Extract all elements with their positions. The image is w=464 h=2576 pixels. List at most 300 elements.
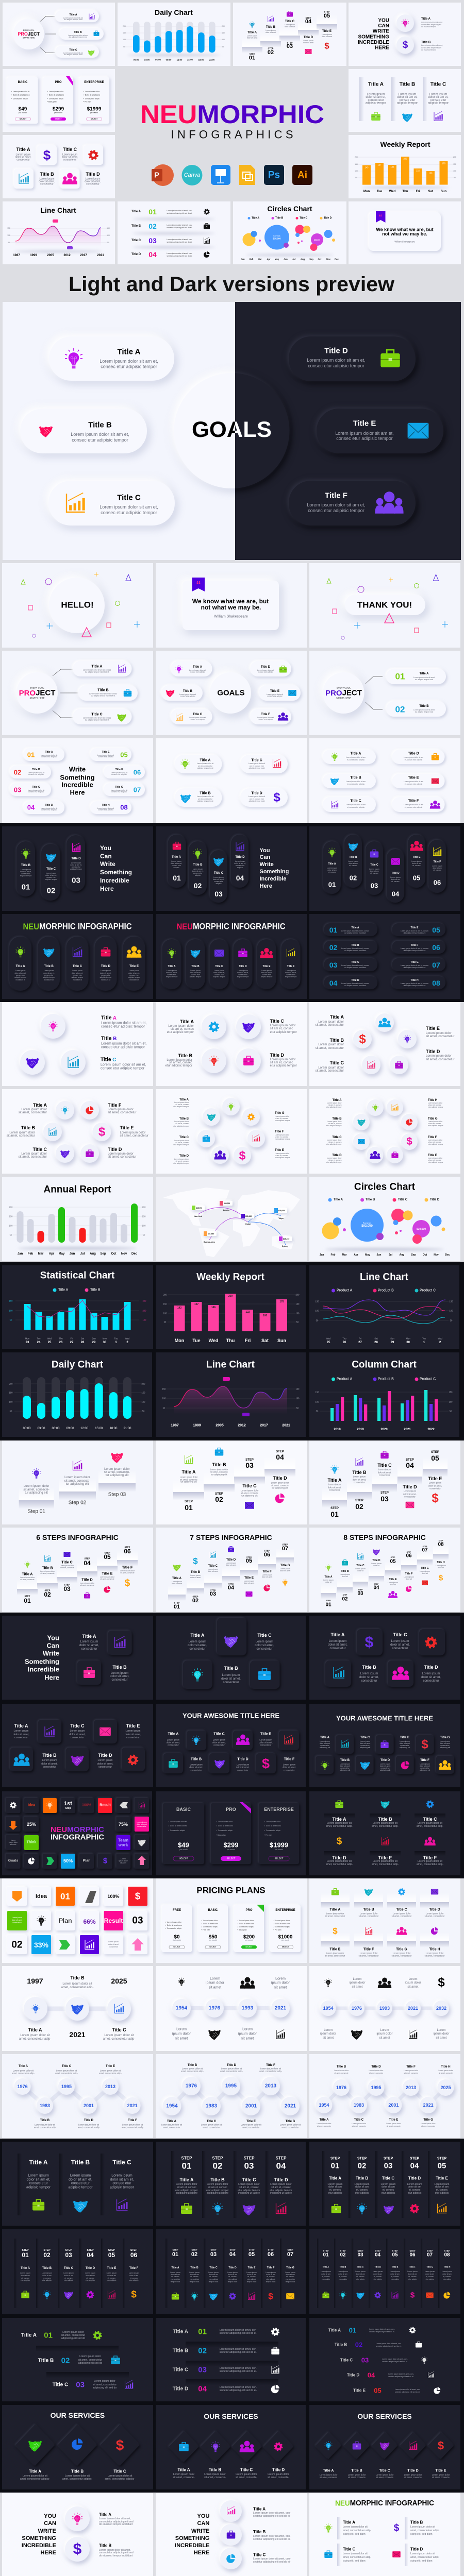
panel: dark four vertical pills: consec etur <box>214 880 224 883</box>
panel: dark five steps columns: etur adipisic <box>382 2192 395 2195</box>
panel: dark column chart <box>309 1352 459 1437</box>
panel: seven circles: sit am et, consec <box>176 1160 189 1162</box>
panel: six circles: Lorem ipsum dolor <box>21 1108 47 1111</box>
panel: five steps: consectetur <box>379 1473 390 1477</box>
panel: four tiles: consectetur <box>63 159 77 162</box>
panel: five steps: Lorem ipsum <box>328 1483 341 1486</box>
panel: dark six steps columns: dolor sit am <box>21 2275 30 2277</box>
panel: five steps: 04 <box>406 1461 414 1469</box>
panel: seven circles: Lorem ipsum dolor <box>174 1101 189 1104</box>
panel: four steps: Title A <box>181 1469 196 1475</box>
panel: dark five steps columns: STEP <box>330 2157 340 2161</box>
panel: dark list five: Title E <box>353 2388 366 2393</box>
panel: eight steps: STEP <box>358 1589 363 1591</box>
panel: dark neumorphic five pills: adipisic tempor <box>43 976 55 978</box>
panel: you can write, three circles: HERE <box>194 2550 209 2556</box>
panel: dark feature tile grid: ipsum dolor <box>9 1841 18 1843</box>
panel: dark eight numbered pills <box>309 914 460 999</box>
panel: dark eight numbered pills: Title D <box>351 979 359 982</box>
panel: dark list five: sectetur adipiscing elit sed do ei- <box>369 2331 395 2333</box>
panel: dark neumorphic five pills: Lorem ipsum <box>101 970 111 972</box>
panel: pricing plans: ✓ Consectetur adipis <box>237 1926 254 1928</box>
panel: dark list five <box>309 2318 460 2401</box>
panel: world map: $35,219 <box>283 1238 289 1240</box>
panel: dark list three <box>2 2318 153 2401</box>
panel: three vertical columns: Lorem ipsum <box>367 93 385 96</box>
panel: seven steps: 07 <box>282 1546 288 1552</box>
panel: five steps: dolor sit amet, <box>378 1471 391 1473</box>
panel: zigzag timeline eight: 1976 <box>336 2085 346 2090</box>
panel: pricing cards: ✓ Dolor sit amet cons <box>47 94 64 96</box>
panel: dark list five: sectetur adipiscing elit sed do ei- <box>388 2376 414 2378</box>
panel: eight numbered pills: 06 <box>134 769 141 776</box>
panel: dark four tiles <box>309 1616 460 1700</box>
panel: light eight columns with shelf: Lorem ipsum dolor <box>393 1952 411 1955</box>
panel: dark eight steps columns: Title D <box>374 2266 381 2268</box>
panel: dark five steps columns: STEP <box>437 2157 446 2161</box>
panel: eight steps: dolor sit <box>342 1575 348 1578</box>
panel: dark seven tiles: consectetur <box>360 1744 370 1747</box>
panel: dark weekly report: 146 <box>211 1306 216 1309</box>
panel: dark list three: Title A <box>21 2333 37 2338</box>
panel: dark eight steps columns: et, consec <box>443 2276 451 2278</box>
panel: dark six steps columns: Lorem ipsum <box>63 2272 74 2274</box>
panel: pricing plans: PRICING PLANS <box>196 1886 266 1895</box>
panel: dark seven steps columns: dolor sit am <box>247 2274 256 2276</box>
panel: dark seven steps columns: 05 <box>248 2251 255 2258</box>
panel: goals six pills: Title B <box>183 690 193 693</box>
panel: dark column chart: 150 <box>449 1391 453 1393</box>
panel: dark statistical chart: 200 <box>142 1310 146 1312</box>
panel: dark six steps columns: et, consec <box>43 2277 51 2279</box>
panel: dark daily chart: 00:00 <box>23 1427 31 1430</box>
panel: eight circles: Lorem ipsum dolor <box>428 1121 443 1123</box>
panel: seven circles: Title B <box>179 1117 189 1121</box>
panel: eight steps: Title B <box>341 1570 349 1573</box>
panel: three steps <box>2 1440 153 1524</box>
panel: circles chart: Apr <box>267 258 271 261</box>
panel: six circles: Title D <box>108 1147 122 1152</box>
panel: seven steps: dolor sit amet <box>244 1582 254 1584</box>
panel: dark three tiles: Lorem ipsum <box>222 1674 240 1677</box>
panel: timeline three: amet, consectetur adip- <box>103 2038 135 2041</box>
panel: six circles: sit amet, consectetur <box>120 1134 148 1138</box>
panel: six circles: Lorem ipsum dolor <box>108 1108 134 1111</box>
panel: dark pricing: ✓ Dolor sit amet consec <box>168 1825 187 1827</box>
panel: six icon pills: et, consec etur adipisic <box>405 759 423 761</box>
panel: five step staircase: STEP <box>268 47 274 49</box>
panel: dark pricing: ✓ Consectetur adipis <box>216 1829 233 1832</box>
panel: dark line chart: Mon <box>406 1337 410 1340</box>
panel: light feature tile grid: 66% <box>83 1918 96 1925</box>
panel: eight numbered pills: Write <box>69 766 86 773</box>
panel: eight steps: 08 <box>438 1541 444 1548</box>
panel: six icon pills: Title D <box>408 752 419 755</box>
panel: dark six tiles: Lorem ipsum <box>167 1738 180 1741</box>
panel: light and dark preview: Title E <box>353 419 376 428</box>
panel: dark four vertical pills: adipisic <box>237 867 243 869</box>
panel: dark neumorphic five pills: Lorem ipsum <box>129 970 139 972</box>
panel: dark four tiles: dolor sit amet, <box>359 1676 379 1679</box>
panel: dark eight steps columns: dolor sit am <box>321 2273 330 2275</box>
panel: our services four diamonds: sit amet, consecte- <box>204 2476 226 2479</box>
panel: dark weekly report: Tue <box>192 1338 201 1343</box>
panel: dark six steps columns: et, consec <box>108 2277 115 2279</box>
panel: dark seven steps columns: etur adipisic <box>209 2278 218 2280</box>
panel: three vertical columns: adipisic tempor <box>366 102 386 105</box>
panel: quote card <box>349 201 461 264</box>
panel: dark four vertical pills: 03 <box>214 890 223 898</box>
panel: dark seven tiles: dolor sit amet <box>320 1742 330 1744</box>
panel: six steps: 02 <box>44 1591 51 1598</box>
panel: neumorphic four items: Title B <box>410 2520 423 2524</box>
panel: dark weekly report: Thu <box>226 1338 235 1343</box>
panel: annual report: 150 <box>142 1215 146 1218</box>
panel: six steps: STEP <box>64 1584 70 1586</box>
panel: you can write two circles: Lorem ipsum dolor sit amet, <box>421 22 443 24</box>
panel: seven steps: Lorem ipsum <box>244 1580 254 1582</box>
panel: dark five tiles: Lorem ipsum <box>126 1730 140 1733</box>
panel: circles chart large: Earnings <box>363 1222 371 1224</box>
panel: six steps: 03 <box>63 1585 71 1592</box>
panel: dark feature tile grid: ipsum dolor <box>119 1860 128 1862</box>
panel: eight circles: etur adipisic tempor <box>326 1161 342 1163</box>
panel: seven circles: etur adipisic tempor <box>173 1106 189 1108</box>
panel: zigzag timeline seven: amet, consectetur <box>203 2126 220 2129</box>
panel: dark neumorphic five pills: adipisic tempor <box>14 976 27 978</box>
panel: eight circles: Title H <box>428 1099 437 1102</box>
panel: line chart: 150 <box>7 227 10 229</box>
panel: six icon pills: Title B <box>350 776 361 780</box>
panel: eight circles: Title A <box>333 1099 342 1102</box>
panel: dark six vertical pills <box>309 826 460 911</box>
panel: light eight columns with shelf: sit amet, consectetur <box>392 1914 412 1918</box>
panel: dark five steps columns: etur adipisic <box>328 2192 342 2195</box>
panel: eight steps: dolor sit <box>325 1581 332 1583</box>
panel: dark three tiles: consectetur <box>256 1648 273 1651</box>
panel: circles chart: Earnings <box>273 235 280 237</box>
panel: eight steps: Lorem ipsum <box>323 1579 334 1581</box>
panel: weekly report: 50 <box>454 177 456 179</box>
panel: light eight columns with shelf: sit amet, consectetur <box>425 1914 445 1918</box>
panel: light feature tile grid: Lorem ipsum <box>12 1917 22 1919</box>
panel: dark seven steps columns: 02 <box>191 2251 197 2258</box>
panel: timeline five: sit amet <box>407 1986 419 1989</box>
panel: dark pricing: $49 <box>178 1841 189 1849</box>
panel: dark neumorphic six pills: Title A <box>168 965 176 968</box>
panel: zigzag timeline eight: sit amet, consecte <box>369 2072 383 2074</box>
panel: dark seven steps columns: Title B <box>190 2266 198 2269</box>
panel: seven steps: STEP <box>264 1550 270 1552</box>
panel: pricing cards: ✓ Consectetur adipis <box>83 98 100 100</box>
panel: project three pills: Title A <box>91 665 103 669</box>
panel: dark three vertical pills: adipisic tempor <box>20 875 32 877</box>
panel: our services five diamonds <box>309 2405 460 2489</box>
panel: timeline five: Lorem <box>380 2029 389 2032</box>
panel: dark seven tiles: consectetur <box>400 1744 410 1747</box>
panel: four tiles: Lorem ipsum <box>62 154 77 157</box>
panel: dark six columns with shelf: Lorem ipsum dolor sit <box>418 1860 443 1863</box>
panel: dark statistical chart: 150 <box>9 1299 13 1302</box>
panel: dark three columns: Lorem ipsum <box>28 2174 49 2177</box>
panel: dark four vertical pills: You <box>260 848 270 854</box>
panel: you can write two circles: HERE <box>375 45 389 50</box>
panel: dark pricing: $299 <box>224 1841 238 1849</box>
panel: dark six vertical pills: dolor sit am <box>370 870 379 872</box>
panel: four icon pills: Title C <box>251 758 262 762</box>
panel: dark six vertical pills: 05 <box>413 874 420 882</box>
panel: dark six steps columns: etur adipisic <box>42 2279 52 2281</box>
panel: eight steps: 04 <box>373 1585 379 1591</box>
panel: six icon pills: Title A <box>350 752 361 755</box>
panel: timeline five: 2021 <box>408 2006 418 2011</box>
panel: daily chart: 100 <box>123 39 126 41</box>
panel: pricing plans: SELECT <box>245 1946 253 1948</box>
panel: dark feature tile grid: dolor sit amet <box>137 1823 147 1825</box>
panel: eight circles: etur adipisic tempor <box>326 1106 342 1108</box>
panel: seven steps: Lorem ipsum <box>208 1568 218 1570</box>
panel: dark three vertical pills: consec etur <box>72 866 81 868</box>
panel: dark daily chart: 100 <box>9 1400 13 1403</box>
panel: weekly report: 146 <box>391 166 394 168</box>
panel: dark four steps columns: etur adipisic tempor <box>270 2189 292 2192</box>
panel: project two pills: Title B <box>419 705 429 708</box>
panel: our services five diamonds: $ <box>438 2439 444 2452</box>
panel: dark six steps columns: etur adipisic <box>129 2279 139 2281</box>
panel: seven circles: sit am et, consec <box>176 1142 189 1144</box>
panel: eight numbered pills: Title H <box>102 804 110 807</box>
panel: eight numbered pills: Title B <box>32 768 40 771</box>
panel: dark eight numbered pills: dui adipisc tempor incididunt <box>344 950 366 952</box>
panel: world map <box>156 1177 307 1261</box>
panel: dark seven steps columns: et, consec <box>267 2276 275 2278</box>
panel: eight circles: etur adipisic tempor <box>428 1143 443 1145</box>
panel: dark six columns with shelf: $ <box>337 1836 342 1846</box>
panel: circles chart large: $93,000 <box>361 1225 373 1228</box>
panel: dark two tiles: consectetur <box>81 1648 97 1651</box>
panel: dark neumorphic six pills: adipisic tempor <box>237 976 249 978</box>
panel: dark neumorphic five pills: NEUMORPHIC INFOGRAPHIC <box>23 921 132 931</box>
panel: dark six steps columns: $ <box>131 2290 137 2300</box>
panel: dark neumorphic six pills: Title F <box>287 965 294 968</box>
panel: dark two tiles: Lorem ipsum <box>80 1640 98 1643</box>
panel: zigzag timeline seven: 1954 <box>166 2103 178 2109</box>
panel: dark list five: Lorem ipsum dolor sit amet, con- <box>376 2343 402 2345</box>
panel: dark seven steps columns: STEP <box>230 2248 236 2251</box>
panel: three vertical columns: dolor sit am et, <box>428 96 449 99</box>
panel: pricing cards: + Basic plan <box>47 101 57 103</box>
hero title <box>140 100 324 141</box>
panel: dark eight steps columns: Lorem ipsum <box>321 2270 331 2273</box>
panel: dark column chart: 2021 <box>404 1428 411 1431</box>
panel: dark six columns with shelf <box>309 1791 460 1875</box>
panel: dark six tiles: dolor sit amet, <box>189 1766 203 1768</box>
panel: circles chart: Jan <box>241 258 245 261</box>
panel: dark six steps columns: 05 <box>108 2251 115 2259</box>
panel: dark neumorphic six pills <box>156 914 307 999</box>
panel: seven circles <box>156 1089 307 1174</box>
panel: dark three tiles: Lorem ipsum <box>256 1640 273 1643</box>
panel: dark seven steps columns: et, consec <box>286 2276 294 2278</box>
panel: light and dark preview: Lorem ipsum dolor sit am et, <box>307 502 366 507</box>
panel: seven circles: sit am et, consec <box>275 1155 288 1157</box>
panel: dark six vertical pills: Lorem ipsum <box>369 868 379 870</box>
panel: eight numbered pills: Lorem ipsum dolor sit <box>28 789 44 791</box>
panel: four circles: sit am et, consec <box>270 1061 293 1064</box>
panel: line chart: 2005 <box>47 254 54 257</box>
panel: circles chart large: $30,000 <box>417 1228 426 1231</box>
panel: numbered list: Title A <box>131 210 141 213</box>
panel: dark five tiles: dolor sit amet, <box>97 1762 113 1766</box>
panel: seven circles: sit am et, consec <box>176 1104 189 1106</box>
panel: dark neumorphic six pills: consec etur <box>167 974 177 976</box>
panel: dark five tiles: consectetur <box>14 1736 28 1739</box>
panel: light feature tile grid: Plan <box>58 1917 72 1925</box>
panel: dark neumorphic five pills: Lorem ipsum <box>72 970 82 972</box>
panel: six icon pills: et, consec etur adipisic <box>347 783 365 785</box>
panel: neumorphic four items <box>309 2493 460 2576</box>
panel: dark three vertical pills: You <box>100 844 111 852</box>
panel: zigzag timeline seven: amet, consectetur <box>242 2126 260 2129</box>
panel: seven circles: Title D <box>179 1155 189 1158</box>
panel: six circles: Title B <box>21 1125 35 1130</box>
panel: dark three vertical pills: Something <box>100 869 132 876</box>
panel: quote slide: We know what we are, but <box>192 598 269 605</box>
panel: dark line chart: Line Chart <box>360 1272 409 1283</box>
panel: dark eight steps columns: dolor sit am <box>390 2273 400 2275</box>
panel: dark eight steps columns: et, consec <box>374 2276 382 2278</box>
panel: dark neumorphic five pills: consec etur <box>73 974 82 976</box>
panel: four steps: sit amet, consecte <box>210 1470 228 1473</box>
panel: seven steps: dolor sit amet <box>172 1583 182 1585</box>
panel: dark daily chart: 12:00 <box>80 1427 89 1430</box>
panel: dark seven steps columns: tempor incid <box>190 2281 199 2283</box>
panel: five circles: Lorem ipsum dolor <box>426 1032 452 1035</box>
panel: seven steps: Lorem ipsum <box>190 1574 201 1577</box>
panel: dark six tiles: $ <box>262 1756 270 1771</box>
panel: dark four tiles: Title B <box>362 1665 376 1670</box>
panel: dark six steps columns: Title D <box>86 2267 95 2270</box>
panel: dark two tiles: Title A <box>82 1634 96 1639</box>
panel: three circles: Title A <box>101 1015 117 1021</box>
panel: zigzag timeline eight: sit amet, consecte <box>352 2125 366 2127</box>
panel: zigzag timeline seven <box>156 2054 307 2138</box>
panel: zigzag timeline eight: Title B <box>337 2065 346 2069</box>
panel: dark line chart: Product B <box>378 1289 394 1292</box>
panel: dark feature tile grid: sit amet <box>120 1862 126 1864</box>
panel: dark seven steps columns: et, consec <box>228 2276 237 2278</box>
panel: seven circles: sit am et, consec <box>275 1117 288 1120</box>
panel: weekly report: 100 <box>453 170 456 172</box>
panel: you can write two circles: do eiusmod tempor <box>421 26 437 28</box>
panel: timeline three: Lorem ipsum dolor sit <box>62 1982 92 1986</box>
panel: you can write, two circles: do eiusmod tempor incididunt <box>99 2523 133 2526</box>
panel: dark six tiles: Title C <box>213 1732 225 1736</box>
panel: light feature tile grid: 100% <box>107 1894 120 1899</box>
panel: dark four steps columns: incididunt ut labore <box>176 2192 197 2195</box>
panel: project three pills <box>2 651 153 735</box>
panel: dark eight steps columns: $ <box>410 2291 415 2300</box>
panel: our services four diamonds: Title C <box>240 2468 253 2472</box>
panel: five steps: dolor sit amet, <box>353 1479 366 1481</box>
panel: you can write two circles: INCREDIBLE <box>358 40 389 45</box>
panel: dark neumorphic five pills: Title D <box>101 965 111 968</box>
panel: dark neumorphic six pills: dolor sit am et, <box>213 972 225 974</box>
panel: seven circles: Lorem ipsum dolor <box>275 1153 290 1155</box>
panel: you can write two circles: SOMETHING <box>358 34 389 40</box>
panel: annual report: Apr <box>49 1252 55 1256</box>
panel: five steps: Title B <box>352 1470 367 1475</box>
panel: pricing plans: per month <box>245 1939 253 1941</box>
panel: thank you <box>309 563 460 648</box>
panel: line chart: 50 <box>8 242 10 244</box>
panel: weekly report: Weekly Report <box>380 140 430 148</box>
panel: our services five diamonds: sit amet, consecte <box>376 2476 394 2479</box>
panel: three vertical columns: Lorem ipsum <box>429 93 447 96</box>
panel: dark seven steps columns: Lorem ipsum <box>189 2272 200 2274</box>
panel: pricing plans: first month <box>173 1939 181 1941</box>
panel: eight circles: Title G <box>428 1117 438 1121</box>
panel: dark four vertical pills: dolor sit am et, <box>171 862 182 865</box>
panel: dark five steps columns: etur adipisic <box>435 2192 449 2195</box>
panel: neumorphic four items: Title A <box>343 2520 355 2524</box>
panel: daily chart: 50 <box>123 46 125 48</box>
panel: dark four vertical pills: Here <box>260 883 272 889</box>
panel: five steps: Lorem ipsum <box>429 1482 442 1484</box>
panel: four steps: Title C <box>242 1483 257 1488</box>
panel: dark six steps columns: 03 <box>65 2251 72 2259</box>
panel: daily chart: 12:00 <box>177 59 183 61</box>
panel: dark eight steps columns: etur adipis <box>322 2278 330 2280</box>
panel: four steps: Title D <box>273 1476 287 1481</box>
panel: neumorphic four items: amet, consectetuer adipi- <box>410 2529 439 2532</box>
panel: five step staircase: Title D <box>304 36 313 39</box>
panel: dark four tiles: Title D <box>424 1665 438 1670</box>
panel: dark five steps columns: Lorem ipsum <box>355 2183 369 2186</box>
panel: dark three tiles: dolor sit amet, <box>188 1644 207 1647</box>
panel: five steps: $ <box>432 1491 439 1505</box>
panel: pricing cards: per month <box>19 111 27 113</box>
panel: dark four vertical pills: Can <box>260 854 271 860</box>
panel: dark four steps columns: etur adipisic tempor <box>238 2189 260 2192</box>
panel: seven steps: STEP <box>246 1556 252 1559</box>
panel: dark six steps columns: 02 <box>43 2251 51 2259</box>
panel: you can write two circles: Title B <box>421 41 431 44</box>
panel: five circles: Lorem ipsum dolor <box>318 1021 344 1024</box>
panel: zigzag timeline six: amet, consectetur adip- <box>12 2072 35 2074</box>
panel: dark feature tile grid: Result <box>100 1803 111 1807</box>
panel: five steps: 02 <box>355 1502 363 1511</box>
panel: dark list five: Lorem ipsum dolor sit amet, con- <box>382 2358 408 2360</box>
panel: dark seven steps columns: tempor incid <box>209 2281 218 2283</box>
panel: eight circles: etur adipisic tempor <box>428 1161 443 1163</box>
panel: five circles: $ <box>359 1032 366 1046</box>
panel: seven steps: dolor sit amet <box>208 1570 218 1572</box>
panel: seven steps: Title A <box>172 1577 182 1580</box>
panel: numbered list: Lorem ipsum dolor sit amet, con- <box>167 239 192 241</box>
panel: dark three columns: Title A <box>29 2159 48 2166</box>
panel: dark eight steps columns: et, consec <box>356 2276 364 2278</box>
panel: project mind map: PROJECT <box>18 31 40 37</box>
panel: timeline five: 1993 <box>379 2006 390 2011</box>
panel: seven circles: Title G <box>275 1112 285 1115</box>
panel: light eight columns with shelf <box>309 1878 460 1963</box>
panel: six steps: sit amet, consecte <box>100 1578 114 1580</box>
panel: dark six tiles: dolor sit amet, <box>167 1741 180 1743</box>
panel: dark neumorphic six pills: Title C <box>215 965 223 968</box>
panel: six circles: Title E <box>120 1125 134 1130</box>
panel: you can write, two circles: Title B <box>99 2543 112 2548</box>
